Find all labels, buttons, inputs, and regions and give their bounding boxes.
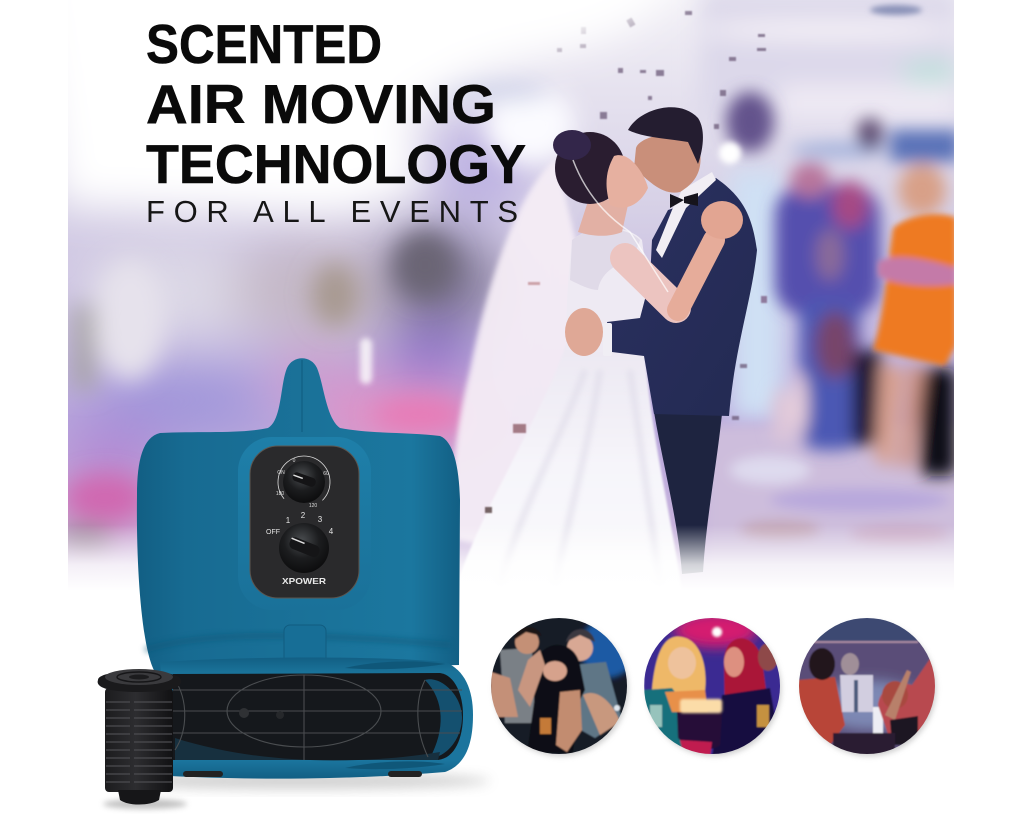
event photo circle: party group bbox=[490, 617, 636, 757]
skirt bbox=[462, 352, 678, 574]
cartridge shadow bbox=[103, 799, 187, 809]
air outlet with grille bbox=[173, 673, 463, 760]
blower base bbox=[160, 658, 473, 779]
blurred crowd bbox=[726, 92, 960, 476]
blower shadow bbox=[110, 773, 490, 789]
title: SCENTED bbox=[146, 13, 382, 75]
bride's veil bbox=[452, 162, 576, 545]
white light streak bbox=[360, 338, 372, 384]
rubber feet bbox=[183, 771, 223, 777]
person in orange dress bbox=[873, 214, 956, 366]
sleeve cuff bbox=[607, 323, 612, 352]
speed labels: 1 bbox=[286, 516, 291, 525]
air mover blower bbox=[137, 358, 473, 779]
speed labels: 4 bbox=[329, 527, 334, 536]
trousers bbox=[654, 412, 722, 574]
glittered floor bbox=[708, 424, 954, 544]
title: AIR MOVING bbox=[146, 73, 496, 135]
lower neck tab bbox=[284, 625, 326, 665]
ceiling shadow streak bbox=[870, 5, 922, 15]
bride's arm and hand bbox=[625, 201, 743, 310]
speed knob bbox=[279, 523, 329, 573]
event photo circle: DJ party bbox=[798, 617, 940, 757]
control panel bbox=[250, 445, 359, 598]
subtitle: FOR ALL EVENTS bbox=[146, 194, 518, 229]
control panel: 60 bbox=[323, 471, 329, 477]
bride's head bbox=[553, 130, 668, 292]
background photo: wedding dance scene bbox=[30, 0, 965, 602]
control panel: ON bbox=[277, 470, 285, 476]
bride bbox=[455, 195, 682, 590]
title: TECHNOLOGY bbox=[146, 133, 526, 195]
groom's hair bbox=[628, 107, 703, 164]
speed labels: 2 bbox=[301, 511, 306, 520]
scent cartridge bbox=[98, 669, 181, 804]
white fades bbox=[30, 0, 960, 602]
groom's hand bbox=[565, 308, 603, 356]
control panel: 0 bbox=[293, 458, 296, 464]
sparkle bbox=[719, 142, 741, 164]
speed labels bbox=[266, 511, 334, 536]
bodice bbox=[578, 229, 645, 348]
blower body and fin handle bbox=[137, 358, 460, 672]
brand logo: XPOWER bbox=[282, 576, 326, 586]
jacket bbox=[607, 178, 757, 416]
title bbox=[146, 13, 526, 195]
event photo circle: birthday cake bbox=[644, 612, 784, 757]
confetti bbox=[485, 11, 767, 513]
bride's shoulder and neck bbox=[578, 200, 628, 236]
groom's face bbox=[634, 134, 701, 193]
groom bbox=[565, 107, 757, 574]
control panel: 180 bbox=[276, 491, 284, 497]
bright right side scene bbox=[430, 0, 960, 420]
control panel: 120 bbox=[309, 503, 317, 509]
speed labels: 3 bbox=[318, 515, 323, 524]
hazy party lights bbox=[50, 0, 960, 554]
shirt collar and bow tie bbox=[656, 172, 716, 258]
timer dial bbox=[267, 445, 341, 519]
control panel bezel bbox=[238, 437, 371, 610]
speed labels: OFF bbox=[266, 529, 280, 536]
